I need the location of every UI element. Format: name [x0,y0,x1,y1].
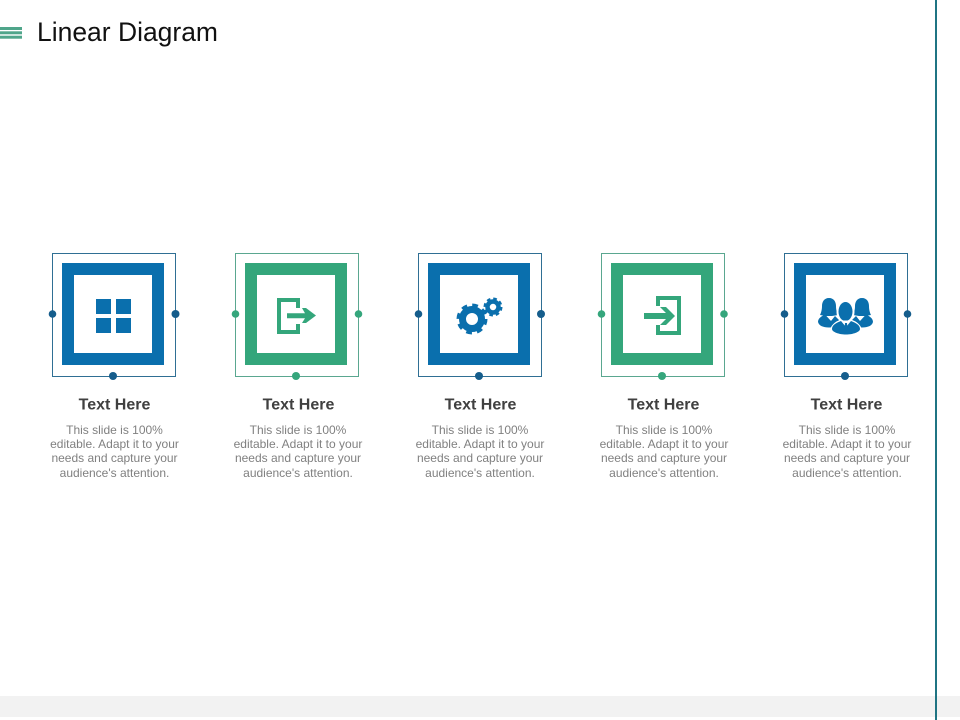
title: Linear Diagram [37,17,218,47]
icon: exit arrow [277,298,316,334]
frame with connector dots [49,254,180,380]
frame with connector dots [415,254,545,380]
description: This slide is 100% [432,423,529,437]
thick square [434,269,524,359]
description: editable. Adapt it to your [783,437,911,451]
icon: team of three people [818,298,873,335]
description: editable. Adapt it to your [416,437,544,451]
description: This slide is 100% [66,423,163,437]
description: editable. Adapt it to your [50,437,179,451]
frame with connector dots [598,254,728,380]
description: needs and capture your [235,451,361,465]
right vertical rule [935,0,937,720]
panel: step 3 [415,254,545,480]
heading: Text Here [445,396,516,414]
description: audience's attention. [243,466,353,480]
description: needs and capture your [784,451,910,465]
thick square [800,269,890,359]
icon: title menu bars [0,27,22,39]
icon: gears [458,299,501,332]
thick square [617,269,707,359]
frame with connector dots [232,254,362,380]
description: needs and capture your [417,451,543,465]
panel: step 4 [598,254,728,480]
panel: step 5 [781,254,911,480]
frame with connector dots [781,254,911,380]
thick square [68,269,158,359]
description: editable. Adapt it to your [234,437,362,451]
icon: enter arrow [644,296,681,335]
thick square [251,269,341,359]
description: audience's attention. [609,466,719,480]
heading: Text Here [263,396,334,414]
footer band [0,696,960,717]
panel: step 2 [232,254,362,480]
description: needs and capture your [51,451,178,465]
heading: Text Here [811,396,882,414]
heading: Text Here [79,396,150,414]
description: This slide is 100% [250,423,347,437]
description: needs and capture your [601,451,727,465]
description: This slide is 100% [616,423,713,437]
panel: step 1 [49,254,180,480]
description: audience's attention. [792,466,902,480]
description: audience's attention. [60,466,169,480]
description: editable. Adapt it to your [600,437,728,451]
description: This slide is 100% [799,423,896,437]
icon: four-square grid [96,299,131,333]
description: audience's attention. [425,466,535,480]
heading: Text Here [628,396,699,414]
